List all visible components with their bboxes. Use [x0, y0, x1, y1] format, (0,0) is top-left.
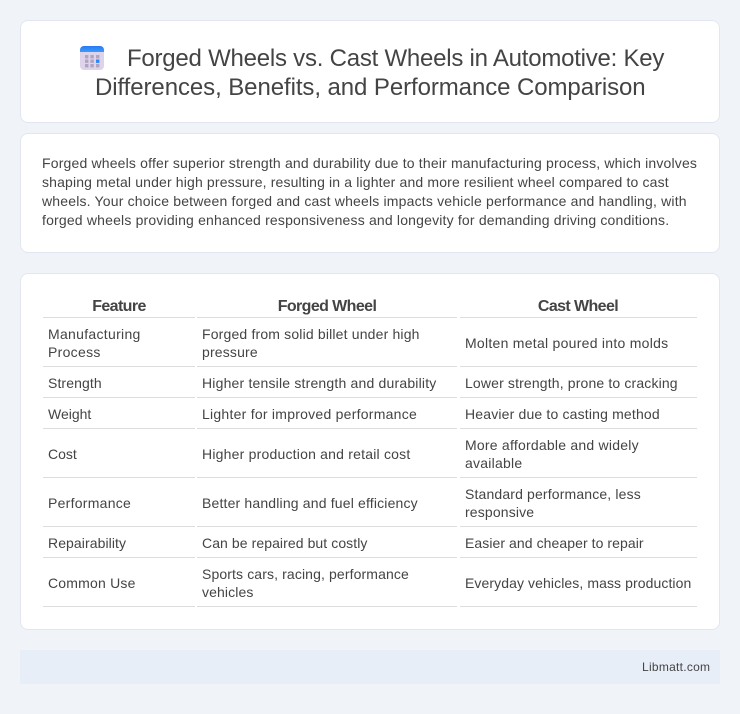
- intro text: [42, 155, 697, 228]
- header: cast wheel: Cast Wheel: [538, 298, 618, 315]
- comparison table: pressure: [202, 344, 258, 360]
- comparison table: More affordable and widely: [465, 437, 639, 453]
- comparison table: Sports cars, racing, performance: [202, 566, 409, 582]
- comparison table: Standard performance, less: [465, 486, 641, 502]
- title: [95, 45, 664, 101]
- comparison table: responsive: [465, 504, 534, 520]
- row: common use: Common Use: [48, 575, 136, 591]
- comparison table: Higher tensile strength and durability: [202, 375, 436, 391]
- header panel: [20, 20, 720, 123]
- row: manufacturing process: Process: [48, 344, 101, 360]
- row: manufacturing process: [48, 326, 141, 360]
- comparison table: Forged from solid billet under high: [202, 326, 420, 342]
- icon: calendar: [80, 46, 104, 70]
- intro text: shaping metal under high pressure, resulting in a lighter and more resilient wheel compared to cast: [42, 174, 669, 190]
- comparison table: vehicles: [202, 584, 254, 600]
- comparison table: Lower strength, prone to cracking: [465, 375, 678, 391]
- title: Forged Wheels vs. Cast Wheels in Automotive: Key: [127, 45, 664, 72]
- title: Differences, Benefits, and Performance Comparison: [95, 74, 646, 101]
- intro text: wheels. Your choice between forged and cast wheels impacts vehicle performance and handling, with: [42, 193, 687, 209]
- header: forged wheel: Forged Wheel: [278, 298, 376, 315]
- comparison table: available: [465, 455, 522, 471]
- comparison table: Easier and cheaper to repair: [465, 535, 644, 551]
- row: cost: Cost: [48, 446, 77, 462]
- comparison table: Better handling and fuel efficiency: [202, 495, 418, 511]
- row: strength: Strength: [48, 375, 102, 391]
- row: weight: Weight: [48, 406, 91, 422]
- comparison table: Lighter for improved performance: [202, 406, 417, 422]
- comparison table: Molten metal poured into molds: [465, 335, 668, 351]
- header: feature: Feature: [92, 298, 146, 315]
- row: performance: Performance: [48, 495, 131, 511]
- comparison table: [43, 298, 697, 607]
- comparison table: Everyday vehicles, mass production: [465, 575, 691, 591]
- table panel: [20, 273, 720, 630]
- comparison table: Higher production and retail cost: [202, 446, 410, 462]
- intro panel: [20, 133, 720, 253]
- row: repairability: Repairability: [48, 535, 126, 551]
- intro text: Forged wheels offer superior strength and durability due to their manufacturing process, which involves: [42, 155, 697, 171]
- row: manufacturing process: Manufacturing: [48, 326, 141, 342]
- comparison table: Can be repaired but costly: [202, 535, 368, 551]
- footer credit: Libmatt.com: [642, 660, 710, 674]
- footer bar: [20, 650, 720, 684]
- comparison table: Heavier due to casting method: [465, 406, 660, 422]
- intro text: forged wheels providing enhanced responsiveness and longevity for demanding driving conditions.: [42, 212, 669, 228]
